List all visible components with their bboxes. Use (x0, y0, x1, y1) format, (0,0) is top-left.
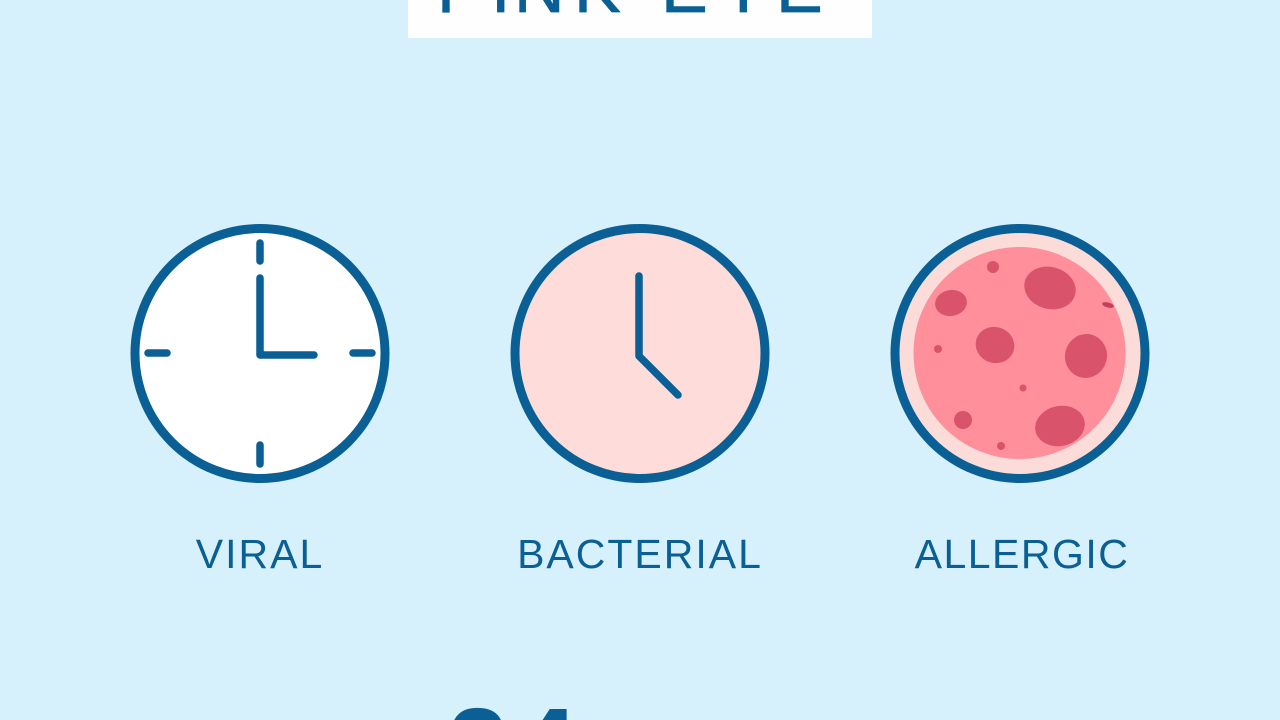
icon: allergic inflamed circle (895, 228, 1145, 478)
label: bacterial: BACTERIAL (517, 531, 763, 577)
label: allergic: ALLERGIC (915, 531, 1129, 577)
title (408, 0, 872, 38)
icon: viral clock (135, 228, 385, 478)
icon: bacterial clock (515, 228, 765, 478)
label: viral: VIRAL (196, 531, 324, 577)
